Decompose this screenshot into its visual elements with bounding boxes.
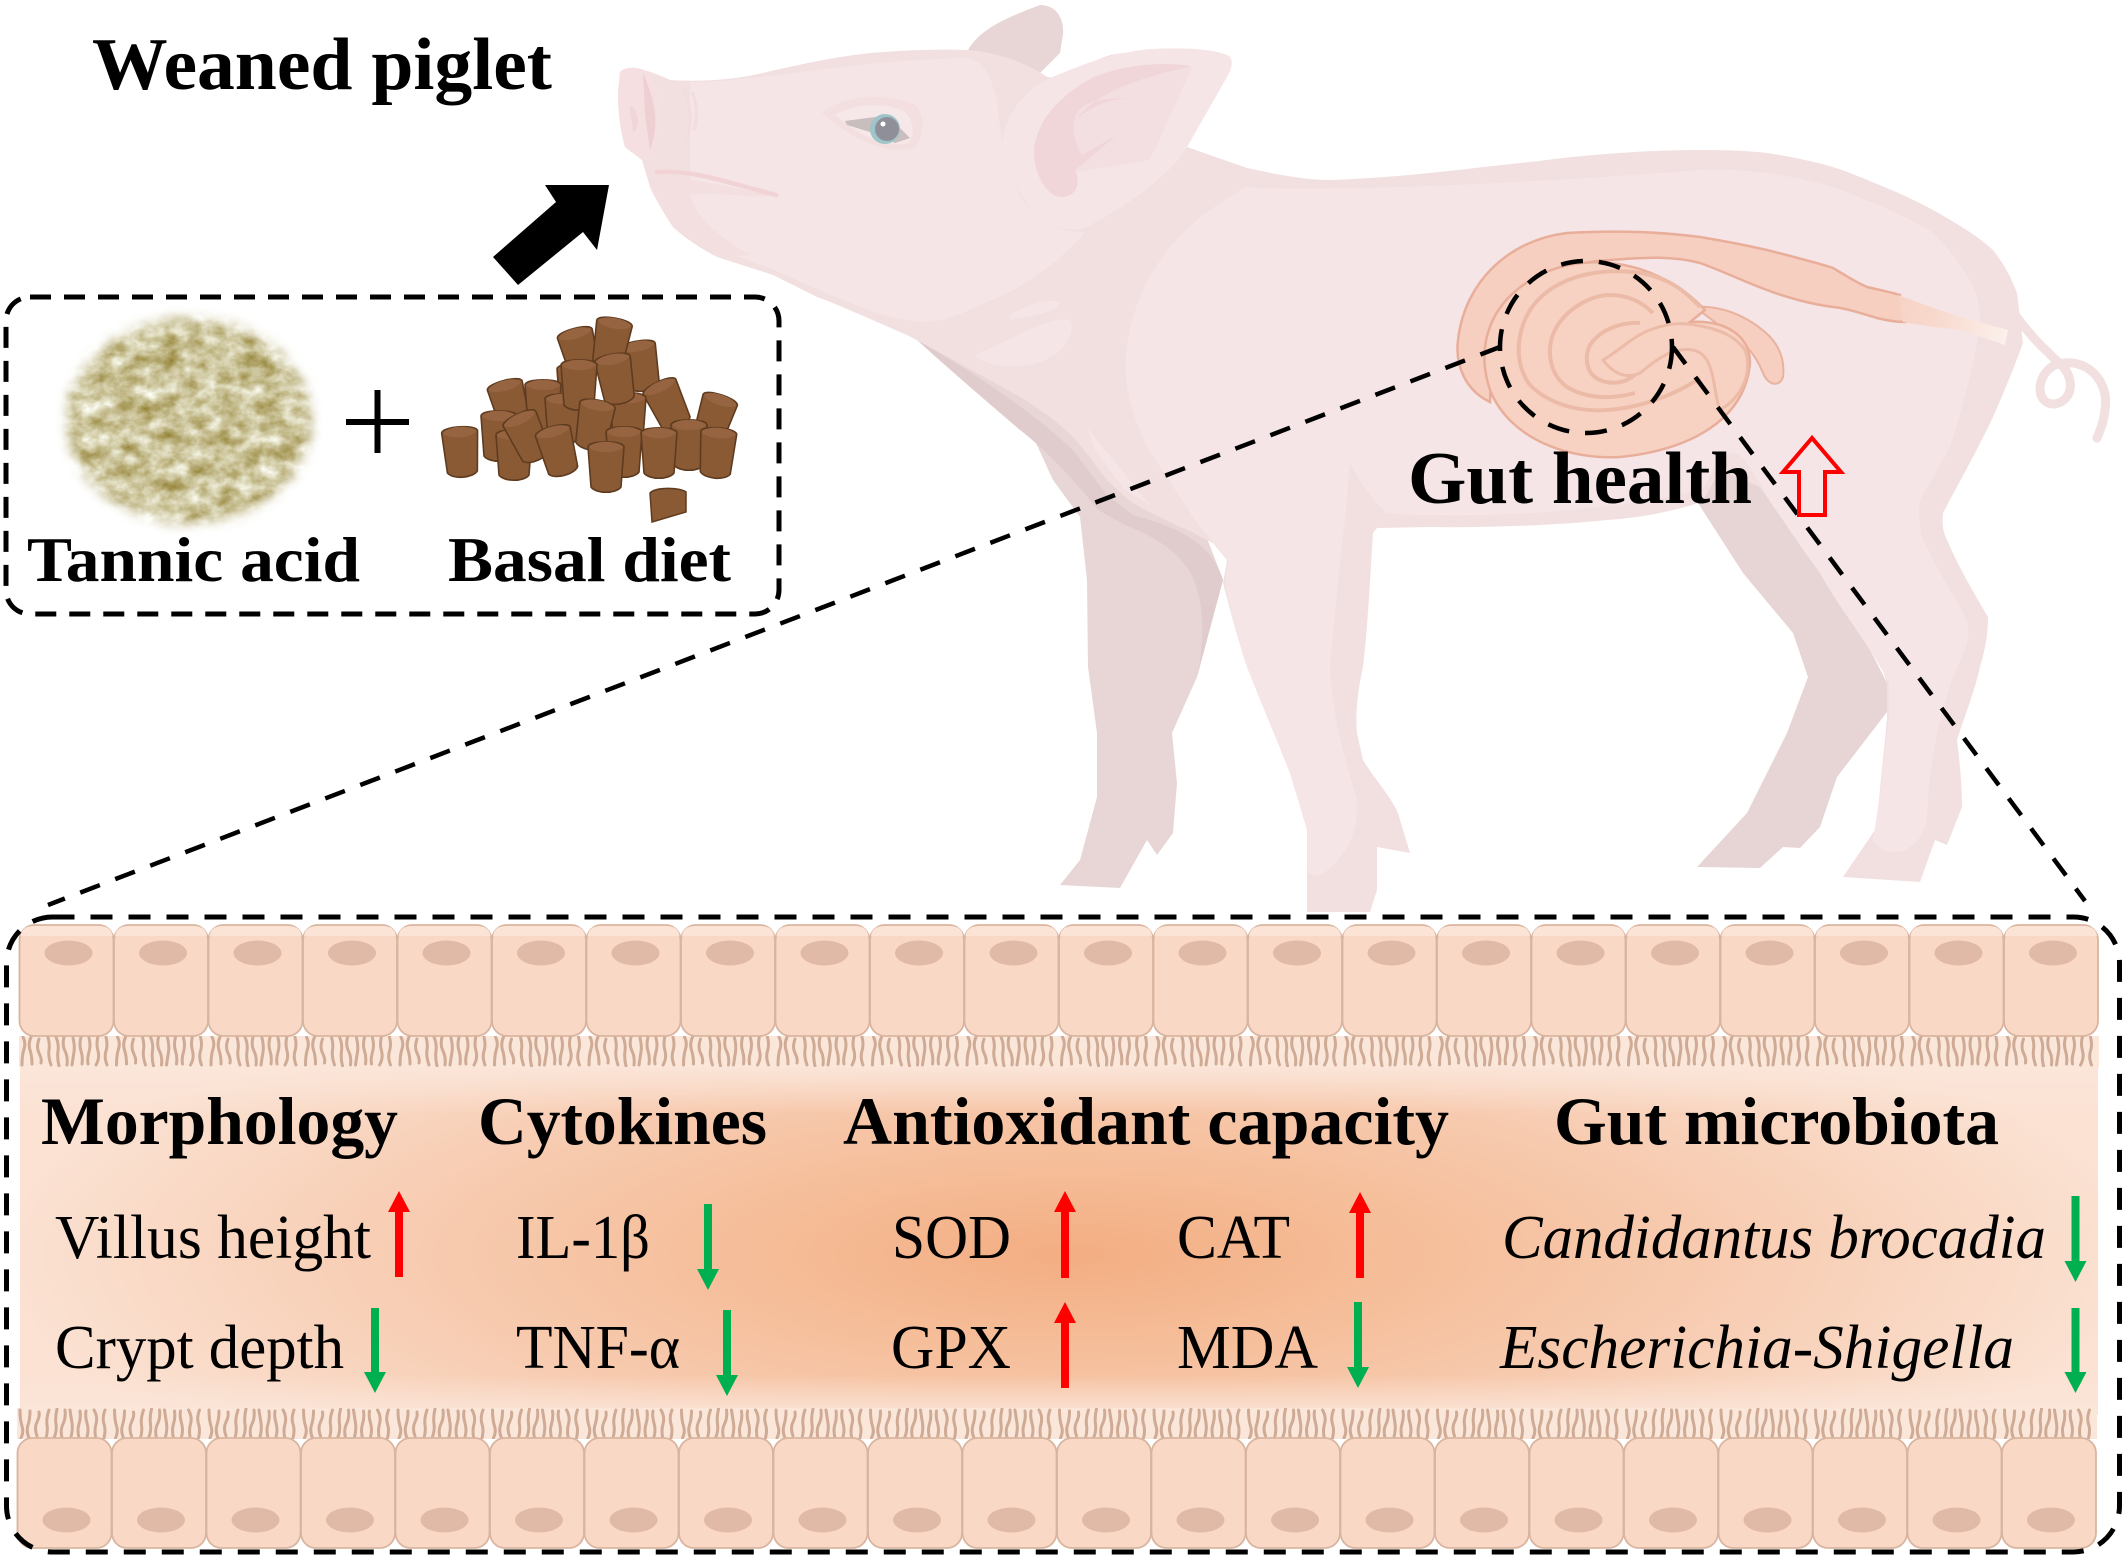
- icon: tannic acid powder: [67, 319, 311, 523]
- label: Candidantus brocadia: Candidantus brocadia: [1502, 1204, 2046, 1272]
- coil rings: [1519, 271, 1700, 410]
- label: CAT: CAT: [1177, 1204, 1290, 1272]
- icon: basal diet pellets: [441, 315, 739, 522]
- arrow: feed to piglet: [493, 185, 609, 285]
- arrow: CAT up: [1349, 1192, 1371, 1278]
- arrow: GPX up: [1054, 1302, 1076, 1388]
- callout: tannic acid plus basal diet box: [6, 297, 779, 614]
- label: gut health: Gut health: [1408, 438, 1752, 520]
- neck highlights: [975, 301, 1150, 505]
- far front leg shadow: [917, 340, 1223, 677]
- intestine: [1457, 232, 2008, 457]
- label: Escherichia-Shigella: Escherichia-Shigella: [1499, 1314, 2014, 1382]
- arrow: IL-1β down: [697, 1204, 719, 1290]
- tail: [2006, 300, 2106, 438]
- dashed frame: [6, 917, 2120, 1552]
- colon end taper: [1898, 295, 2008, 345]
- head lighter area: [666, 58, 1085, 322]
- arrow: crypt depth down: [364, 1308, 386, 1393]
- lumen gradient: [20, 1060, 2098, 1415]
- heading: gut microbiota: Gut microbiota: [1554, 1083, 1999, 1159]
- microvilli: [17, 1036, 2099, 1439]
- trunk and legs lighter area: [1126, 170, 1980, 875]
- heading: morphology: Morphology: [41, 1083, 398, 1159]
- body silhouette: [618, 50, 2023, 912]
- arrow: gut health up: [1783, 438, 1841, 515]
- epithelial cells: top row: [20, 925, 2098, 1036]
- panel: intestinal lumen: [6, 917, 2120, 1552]
- lower jaw: [650, 172, 780, 257]
- snout: [618, 68, 696, 160]
- title: weaned piglet: Weaned piglet: [92, 24, 552, 106]
- icon: far ear: [968, 5, 1063, 75]
- arrow: TNF-α down: [716, 1310, 738, 1396]
- zoom indicator: dashed circle and guide lines: [48, 261, 2085, 905]
- far front leg: [917, 340, 1223, 888]
- arrow: villus height up: [388, 1191, 410, 1277]
- long colon: [1457, 232, 1905, 402]
- arrow: Escherichia-Shigella down: [2064, 1308, 2086, 1393]
- label: IL-1β: IL-1β: [516, 1204, 650, 1272]
- appendix: [1695, 307, 1783, 384]
- label: SOD: SOD: [892, 1204, 1011, 1272]
- heading: antioxidant capacity: Antioxidant capacity: [843, 1083, 1449, 1159]
- mouth: [657, 172, 776, 195]
- inner hook: [1603, 324, 1748, 410]
- eye: [822, 97, 922, 150]
- pig illustration: [618, 5, 2106, 912]
- arrow: Candidantus brocadia down: [2064, 1196, 2086, 1282]
- main coil: [1484, 262, 1750, 457]
- label: crypt depth: Crypt depth: [55, 1314, 344, 1382]
- label: GPX: GPX: [891, 1314, 1011, 1382]
- label: MDA: MDA: [1177, 1314, 1318, 1382]
- label: TNF-α: TNF-α: [516, 1314, 680, 1382]
- epithelial cells: bottom row: [18, 1438, 2096, 1548]
- heading: cytokines: Cytokines: [478, 1083, 767, 1159]
- main ear: [1002, 48, 1232, 230]
- label: tannic acid: Tannic acid: [27, 524, 360, 595]
- far hind leg: [1697, 465, 1887, 868]
- arrow: MDA down: [1347, 1302, 1369, 1388]
- dashed frame: [6, 297, 779, 614]
- label: basal diet: Basal diet: [448, 524, 732, 595]
- label: villus height: Villus height: [55, 1204, 371, 1272]
- icon: plus sign: [346, 390, 409, 453]
- arrow: SOD up: [1054, 1191, 1076, 1278]
